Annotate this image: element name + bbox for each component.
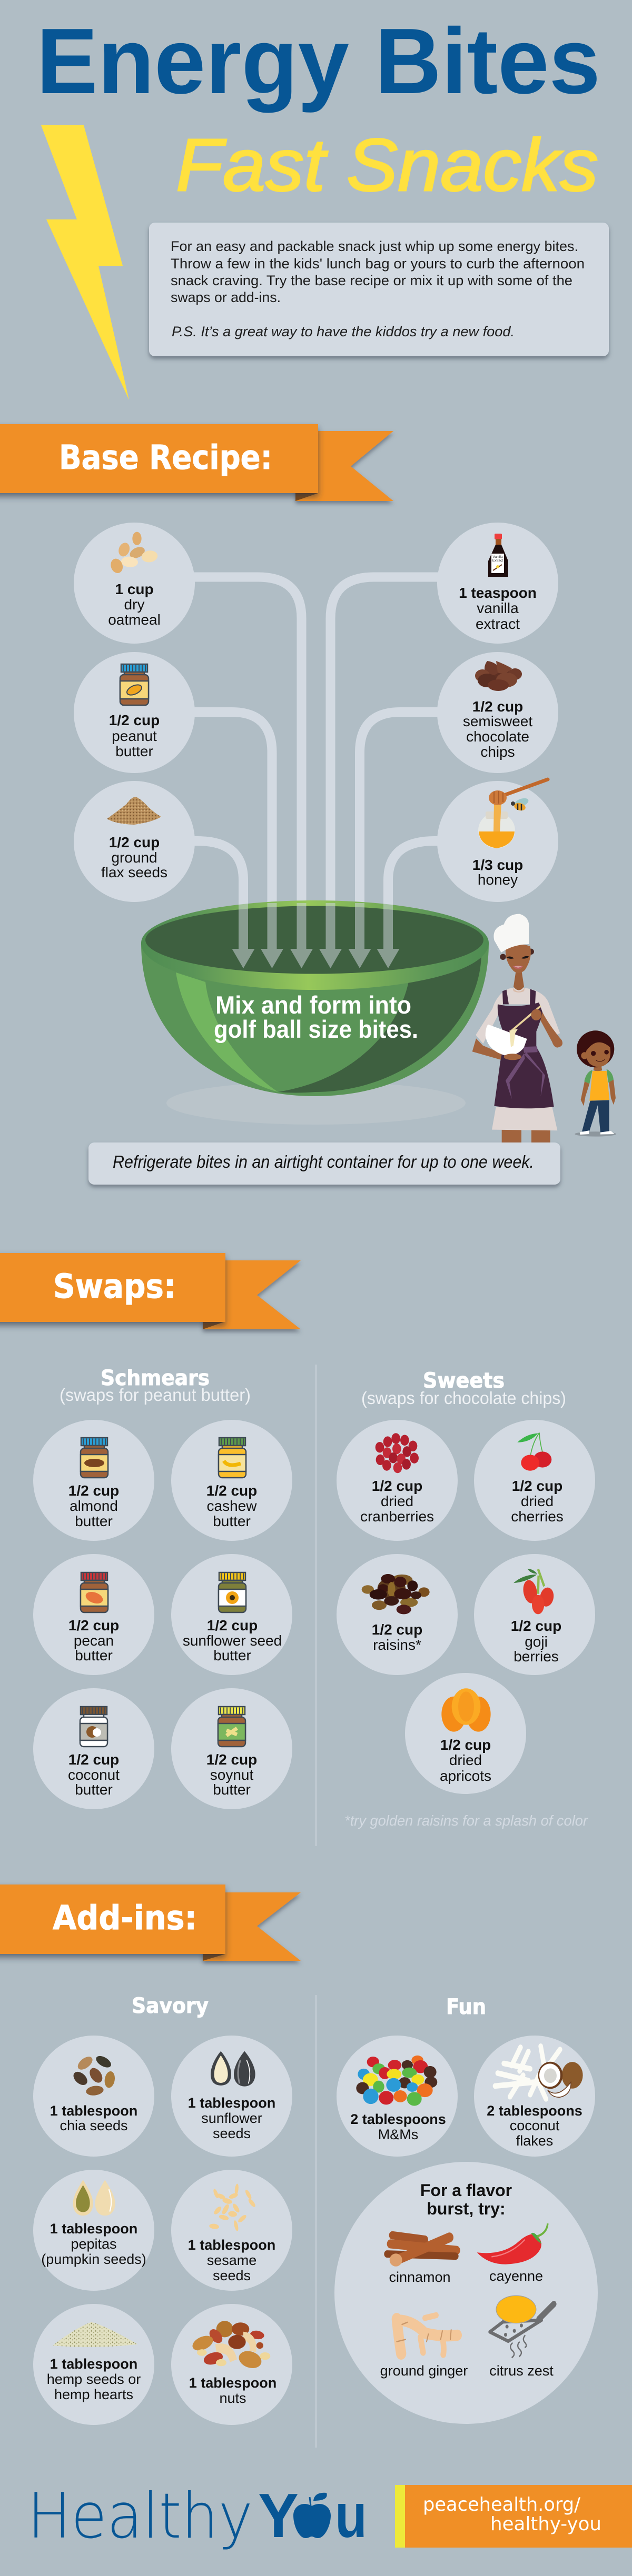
swap: soynut butter bbox=[171, 1688, 292, 1809]
ingredient: flax seeds: flax seeds bbox=[101, 864, 167, 880]
arrows into bowl bbox=[232, 903, 399, 968]
swap: soynut butter: 1/2 cup bbox=[206, 1751, 257, 1768]
add-in: hemp seeds bbox=[33, 2304, 154, 2425]
icon: hemp seed pile bbox=[53, 2322, 138, 2347]
ingredient: oatmeal: 1 cup bbox=[115, 581, 154, 597]
swap: cashew butter: cashew bbox=[207, 1498, 257, 1514]
panel: flavor burst: citrus zest bbox=[489, 2363, 554, 2379]
add-in: sesame seeds: 1 tablespoon bbox=[188, 2237, 275, 2253]
icon: peanut butter jar bbox=[120, 664, 149, 705]
add-in: M&Ms: M&Ms bbox=[378, 2127, 418, 2142]
swap: dried cranberries bbox=[337, 1420, 458, 1541]
swap: cashew butter: butter bbox=[213, 1513, 251, 1529]
swap: dried cranberries: 1/2 cup bbox=[372, 1478, 422, 1494]
add-in: coconut flakes bbox=[474, 2036, 595, 2157]
panel: intro text: For an easy and packable snack just whip up some energy bites. bbox=[171, 238, 578, 254]
ingredient: vanilla extract: extract bbox=[476, 616, 520, 632]
panel: flavor burst bbox=[334, 2162, 598, 2424]
icon: cinnamon bbox=[387, 2236, 457, 2267]
add-in: pepitas: pepitas bbox=[71, 2236, 117, 2252]
logo: HealthyYou: Healthy bbox=[27, 2480, 253, 2553]
panel: intro text: P.S. It’s a great way to have the kiddos try a new food. bbox=[172, 324, 515, 339]
swap: raisins bbox=[337, 1554, 458, 1675]
icon: mixed nuts bbox=[191, 2321, 270, 2370]
icon: pepitas bbox=[73, 2180, 115, 2216]
add-in: hemp seeds: hemp seeds or bbox=[47, 2371, 141, 2387]
icon: honey jar with dipper and bee bbox=[478, 779, 548, 848]
swap: coconut butter: butter bbox=[75, 1781, 113, 1798]
panel: intro text: swaps or add-ins. bbox=[171, 289, 281, 305]
swap: goji berries: 1/2 cup bbox=[511, 1618, 561, 1634]
swap: pecan butter: butter bbox=[75, 1647, 113, 1663]
swap: soynut butter: butter bbox=[213, 1781, 251, 1798]
banner: Swaps bbox=[0, 1253, 301, 1329]
icon: soynut butter jar bbox=[218, 1707, 245, 1747]
ingredient: honey: honey bbox=[478, 871, 518, 888]
banner: Add-ins: Add-ins: bbox=[53, 1899, 197, 1937]
swap: dried apricots bbox=[405, 1673, 526, 1794]
panel: intro text: Throw a few in the kids' lunch bag or yours to curb the afternoon bbox=[171, 256, 585, 272]
swap: raisins: raisins* bbox=[373, 1637, 421, 1653]
ingredient: peanut butter: butter bbox=[115, 743, 153, 759]
add-in: sesame seeds: sesame bbox=[207, 2252, 256, 2268]
swap: raisins: 1/2 cup bbox=[372, 1621, 422, 1638]
heading: Sweets bbox=[361, 1369, 566, 1408]
ingredient: vanilla extract: vanilla bbox=[477, 600, 519, 616]
swap: goji berries bbox=[474, 1554, 595, 1675]
add-in: chia seeds: chia seeds bbox=[60, 2118, 128, 2133]
swap: dried cherries bbox=[474, 1420, 595, 1541]
heading: Savory: Savory bbox=[132, 1994, 209, 2018]
swap: goji berries: goji bbox=[525, 1633, 548, 1650]
icon: apple bbox=[293, 2493, 331, 2538]
swap: sunflower seed butter: butter bbox=[213, 1647, 251, 1663]
swap: almond butter: almond bbox=[70, 1498, 118, 1514]
ingredient: flax seeds: ground bbox=[111, 849, 157, 866]
swap: sunflower seed butter: sunflower seed bbox=[183, 1632, 282, 1649]
swap: almond butter: 1/2 cup bbox=[68, 1482, 119, 1499]
icon: lemon and zester bbox=[490, 2296, 554, 2358]
banner: Base Recipe: Base Recipe: bbox=[59, 438, 272, 477]
ingredient: oatmeal: oatmeal bbox=[108, 612, 161, 628]
ingredient: flax seeds: 1/2 cup bbox=[109, 834, 160, 850]
add-in: sunflower seeds: seeds bbox=[213, 2126, 251, 2141]
icon: sesame seeds bbox=[209, 2183, 256, 2232]
swap: dried cranberries: dried bbox=[381, 1493, 413, 1509]
add-in: nuts: 1 tablespoon bbox=[189, 2375, 276, 2391]
icon: ginger bbox=[397, 2315, 457, 2354]
ingredient: peanut butter: peanut bbox=[112, 728, 157, 744]
swap: almond butter: butter bbox=[75, 1513, 113, 1529]
bowl instruction text: golf ball size bites. bbox=[214, 1015, 418, 1043]
footer URL block bbox=[395, 2485, 632, 2548]
icon: pecan butter jar bbox=[81, 1572, 108, 1612]
add-in: nuts bbox=[171, 2304, 292, 2425]
heading: Sweets: Sweets bbox=[423, 1369, 505, 1393]
add-in: pepitas bbox=[33, 2170, 154, 2291]
swap: dried apricots: dried bbox=[449, 1752, 482, 1768]
ingredient: honey bbox=[437, 779, 558, 902]
ingredient: oatmeal: dry bbox=[124, 596, 144, 613]
swap: goji berries: berries bbox=[514, 1648, 559, 1665]
bowl bbox=[141, 900, 489, 1096]
add-in: sunflower seeds: 1 tablespoon bbox=[188, 2095, 275, 2111]
heading: Schmears: (swaps for peanut butter) bbox=[60, 1385, 251, 1405]
ingredient: vanilla extract: 1 teaspoon bbox=[459, 585, 537, 601]
add-in: sesame seeds bbox=[171, 2170, 292, 2291]
icon: vanilla bottle bbox=[488, 534, 508, 577]
icon: apricots bbox=[441, 1688, 491, 1732]
add-in: M&Ms: 2 tablespoons bbox=[350, 2111, 446, 2127]
ingredient: chocolate chips: chips bbox=[480, 744, 515, 760]
icon: vanilla bottle: Vanilla bbox=[492, 555, 503, 559]
ingredient: chocolate chips bbox=[437, 652, 558, 773]
ingredient: vanilla extract bbox=[437, 523, 558, 644]
icon: vanilla bottle: Extract bbox=[492, 559, 503, 563]
icon: coconut flakes bbox=[495, 2046, 583, 2099]
swap: almond butter bbox=[33, 1420, 154, 1541]
icon: cayenne pepper bbox=[477, 2223, 548, 2264]
add-in: M&Ms bbox=[337, 2036, 458, 2157]
swap: cashew butter: 1/2 cup bbox=[206, 1482, 257, 1499]
panel: flavor burst: burst, try: bbox=[427, 2199, 506, 2218]
add-in: hemp seeds: hemp hearts bbox=[54, 2387, 133, 2402]
ingredient: chocolate chips: 1/2 cup bbox=[472, 698, 523, 715]
ingredient: peanut butter bbox=[74, 652, 195, 773]
swap: dried cherries: dried bbox=[521, 1493, 554, 1509]
bowl instruction text: Mix and form into bbox=[215, 991, 411, 1019]
swap: dried apricots: 1/2 cup bbox=[440, 1737, 491, 1753]
callout: refrigerate: Refrigerate bites in an airtight container for up to one week. bbox=[113, 1152, 534, 1171]
swap: pecan butter: pecan bbox=[74, 1632, 114, 1649]
add-in: sunflower seeds bbox=[171, 2036, 292, 2157]
add-in: coconut flakes: 2 tablespoons bbox=[487, 2103, 582, 2119]
swap: cashew butter bbox=[171, 1420, 292, 1541]
panel: flavor burst: cinnamon bbox=[389, 2269, 451, 2285]
title: Energy Bites: Energy Bites bbox=[36, 9, 600, 113]
add-in: pepitas: (pumpkin seeds) bbox=[41, 2251, 146, 2267]
add-in: coconut flakes: coconut bbox=[510, 2118, 560, 2133]
add-in: sesame seeds: seeds bbox=[213, 2268, 251, 2283]
ingredient: chocolate chips: semisweet bbox=[463, 713, 532, 729]
icon: sunflower butter jar bbox=[219, 1572, 246, 1612]
ingredient: flax seeds bbox=[74, 781, 195, 902]
add-in: pepitas: 1 tablespoon bbox=[50, 2221, 137, 2237]
footnote: *try golden raisins for a splash of color bbox=[344, 1812, 589, 1829]
swap: dried apricots: apricots bbox=[440, 1768, 491, 1784]
callout: refrigerate bbox=[88, 1142, 560, 1185]
panel: flavor burst: cayenne bbox=[489, 2268, 543, 2284]
icon: cashew butter jar bbox=[219, 1438, 246, 1478]
icon: sunflower seeds bbox=[211, 2051, 255, 2087]
footer URL block: healthy-you bbox=[490, 2513, 601, 2535]
banner: Swaps: Swaps: bbox=[53, 1267, 176, 1306]
icon: almond butter jar bbox=[81, 1438, 108, 1478]
banner: Base Recipe bbox=[0, 424, 393, 501]
ground shadow under bowl bbox=[166, 1081, 466, 1125]
icon: chia seeds bbox=[72, 2054, 116, 2097]
swap: soynut butter: soynut bbox=[210, 1767, 253, 1783]
heading: Schmears: Schmears bbox=[101, 1366, 210, 1390]
icon: cranberries bbox=[376, 1433, 419, 1473]
heading: Fun: Fun bbox=[446, 1995, 486, 2019]
icon: raisins bbox=[362, 1574, 430, 1614]
icon: flax pile bbox=[107, 797, 161, 825]
panel: intro text bbox=[149, 223, 609, 356]
swap: pecan butter bbox=[33, 1554, 154, 1675]
swap: coconut butter: 1/2 cup bbox=[68, 1751, 119, 1768]
icon: lightning bolt bbox=[41, 125, 129, 400]
icon: coconut butter jar bbox=[80, 1707, 107, 1747]
ingredient: peanut butter: 1/2 cup bbox=[109, 712, 160, 728]
add-in: nuts: nuts bbox=[219, 2390, 246, 2406]
banner: Add-ins bbox=[0, 1885, 301, 1961]
heading: Schmears bbox=[60, 1366, 251, 1405]
ingredient: honey: 1/3 cup bbox=[472, 857, 523, 873]
swap: sunflower seed butter: 1/2 cup bbox=[207, 1617, 258, 1633]
add-in: sunflower seeds: sunflower bbox=[201, 2110, 262, 2126]
swap: dried cherries: 1/2 cup bbox=[512, 1478, 562, 1494]
icon: goji berries bbox=[514, 1569, 556, 1614]
swap: coconut butter: coconut bbox=[68, 1767, 120, 1783]
add-in: chia seeds bbox=[33, 2036, 154, 2157]
swap: pecan butter: 1/2 cup bbox=[68, 1617, 119, 1633]
swap: dried cranberries: cranberries bbox=[360, 1508, 434, 1525]
icon: oats bbox=[109, 532, 159, 575]
heading: Sweets: (swaps for chocolate chips) bbox=[361, 1388, 566, 1408]
bowl instruction text bbox=[214, 991, 418, 1043]
ingredient: chocolate chips: chocolate bbox=[466, 728, 529, 745]
icon: cherries bbox=[517, 1432, 551, 1471]
panel: flavor burst: ground ginger bbox=[380, 2363, 468, 2379]
illustration: child bbox=[575, 1030, 616, 1137]
add-in: chia seeds: 1 tablespoon bbox=[50, 2103, 137, 2119]
icon: chocolate chips bbox=[475, 661, 522, 691]
panel: intro text: snack craving. Try the base recipe or mix it up with some of the bbox=[171, 273, 572, 288]
logo: HealthyYou: u bbox=[335, 2481, 367, 2551]
subtitle: Fast Snacks: Fast Snacks bbox=[176, 123, 598, 206]
swap: dried cherries: cherries bbox=[511, 1508, 564, 1525]
swap: sunflower seed butter bbox=[171, 1554, 292, 1675]
icon: M&Ms bbox=[356, 2056, 437, 2106]
ingredient: oatmeal bbox=[74, 523, 195, 644]
add-in: coconut flakes: flakes bbox=[516, 2133, 553, 2149]
illustration: chef mother with mixing bowl bbox=[472, 914, 562, 1143]
panel: flavor burst: For a flavor bbox=[420, 2181, 512, 2200]
connectors from ingredients to bowl bbox=[190, 577, 442, 926]
footer URL block: peacehealth.org/ bbox=[423, 2494, 581, 2515]
logo: HealthyYou: Y bbox=[258, 2481, 299, 2551]
add-in: hemp seeds: 1 tablespoon bbox=[50, 2356, 137, 2372]
swap: coconut butter bbox=[33, 1688, 154, 1809]
